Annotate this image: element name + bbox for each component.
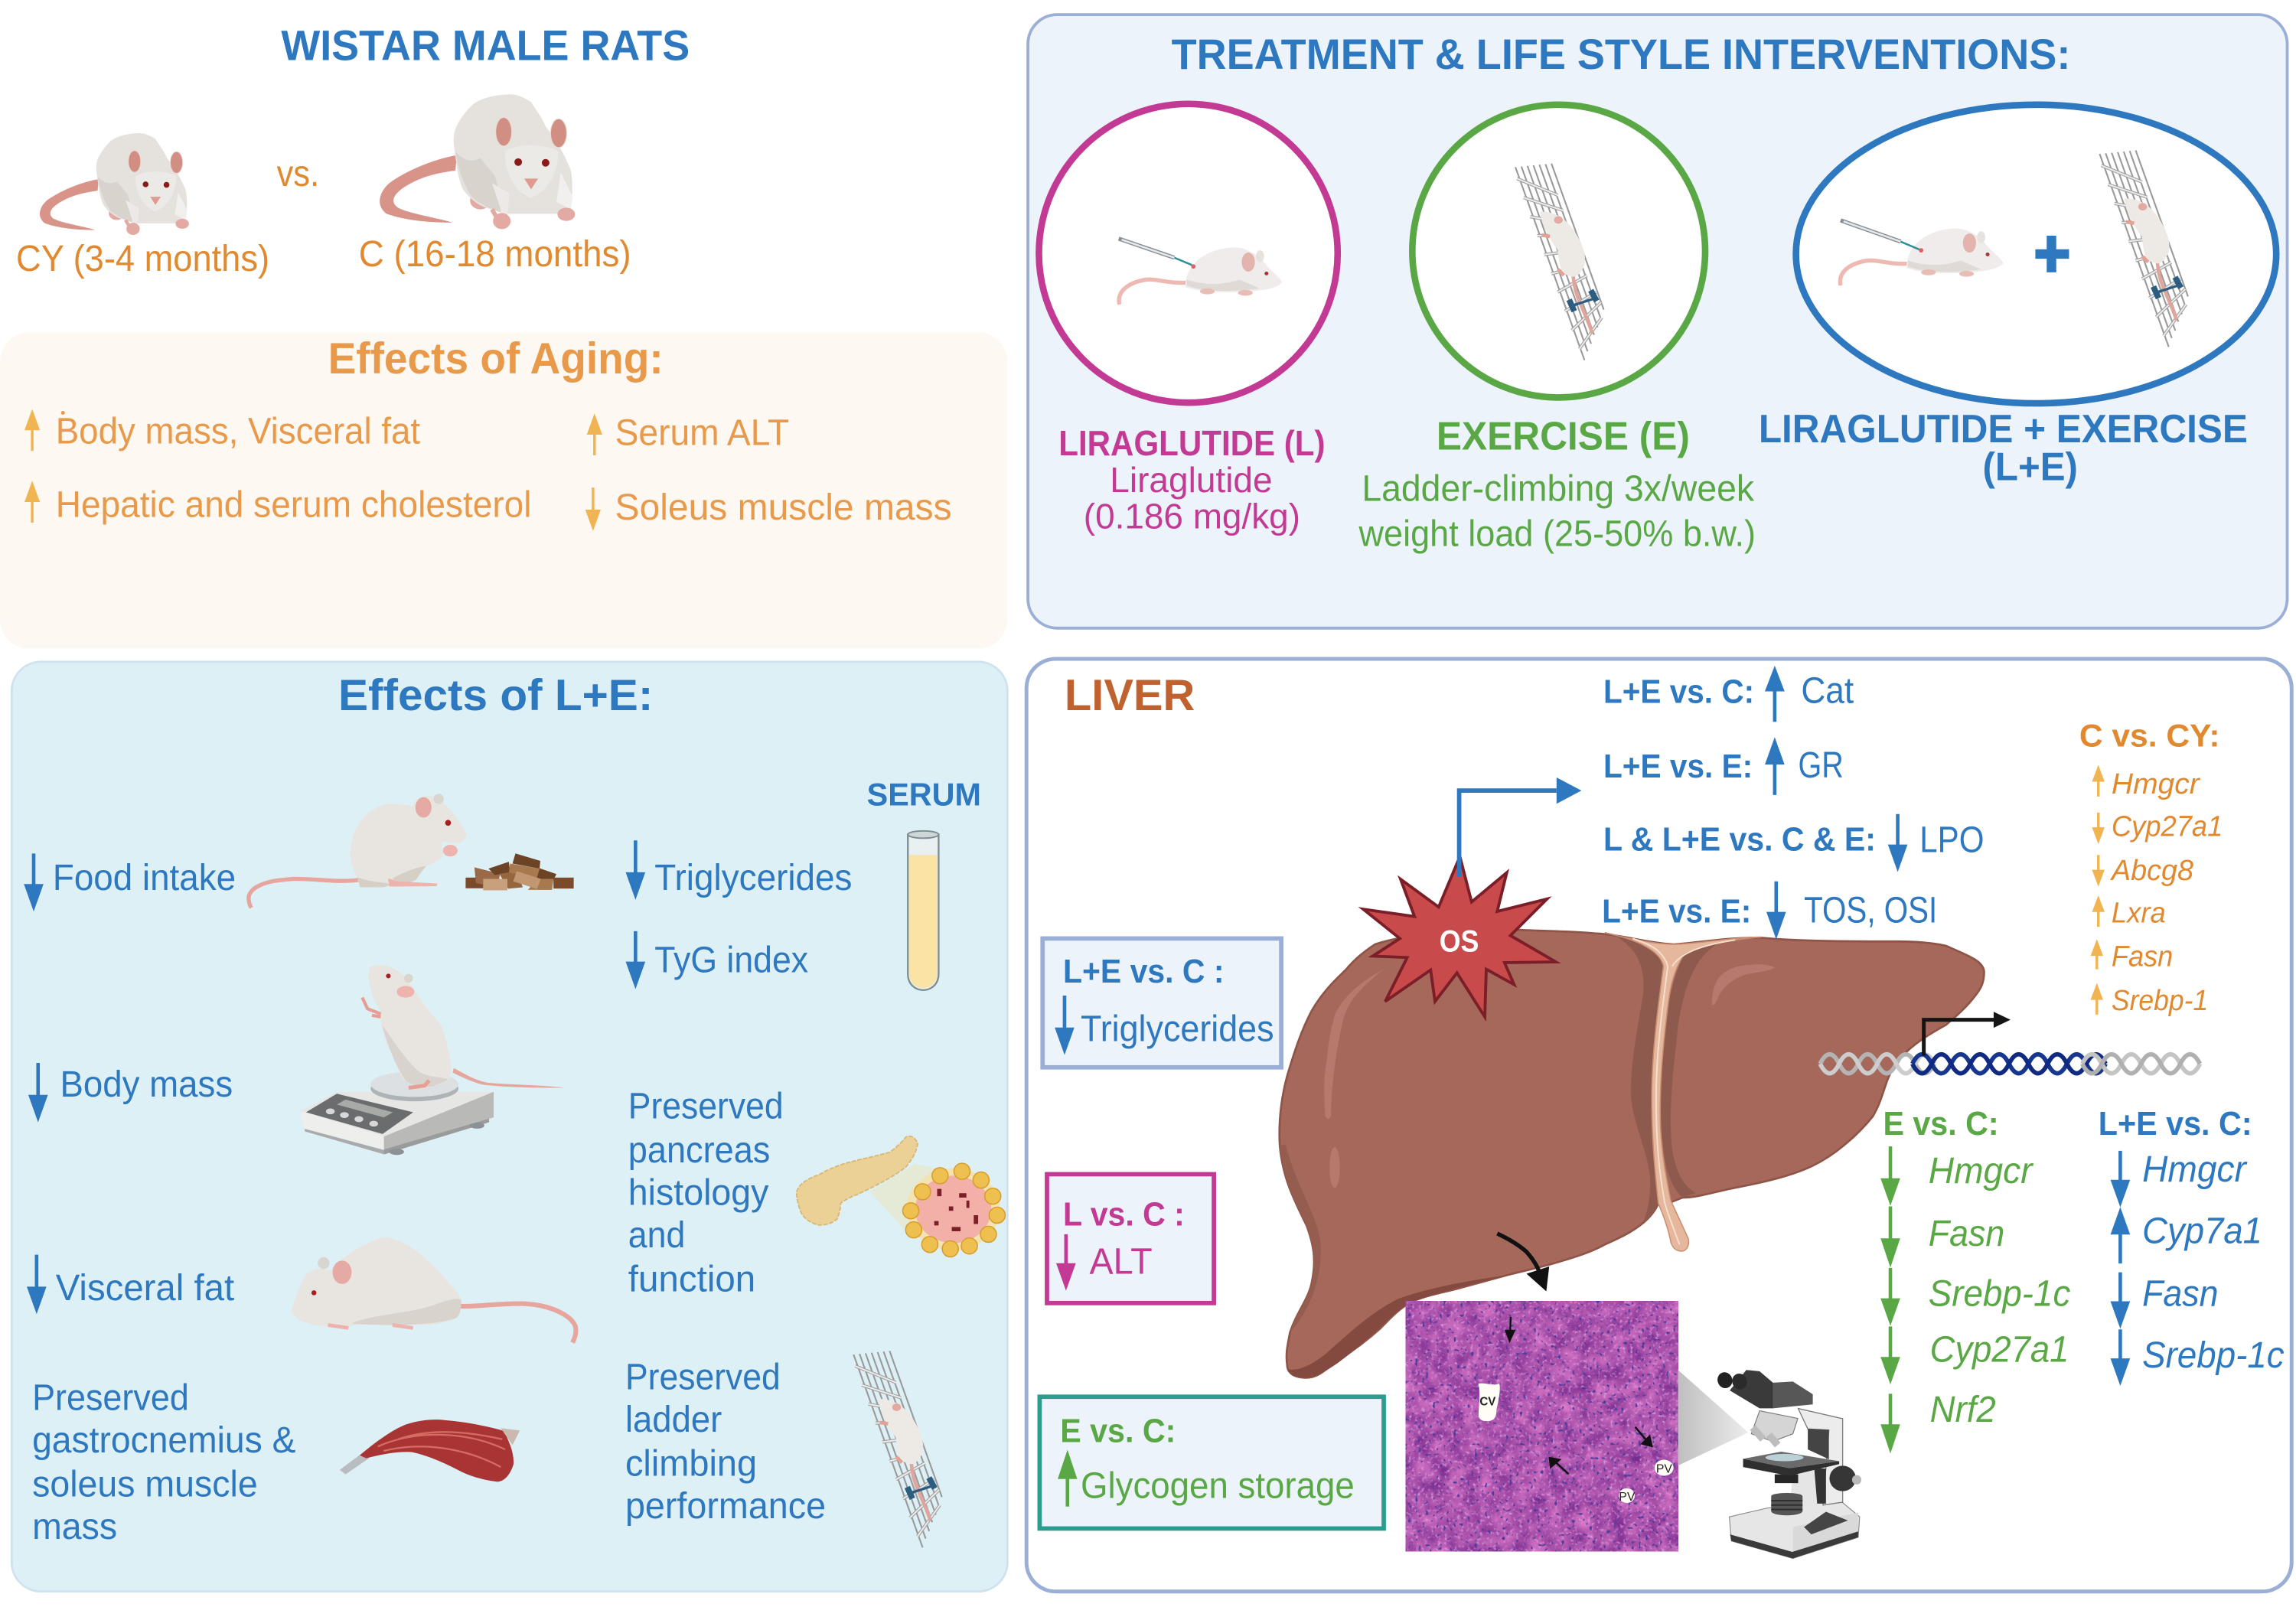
arrowhead: oxidative stress [1557, 777, 1581, 804]
item: LPO: L & L+E vs. C & E: [1603, 821, 1876, 859]
list: L+E vs C genes [2099, 1105, 2285, 1380]
heading: Wistar male rats: WISTAR MALE RATS [281, 21, 690, 69]
item: soleus muscle mass: Soleus muscle mass [615, 487, 952, 528]
item: Cat: L+E vs. C: [1603, 673, 1754, 710]
callout: L vs C ALT [1047, 1174, 1214, 1303]
text: preserved pancreas: function [628, 1259, 755, 1299]
icon: pancreas [797, 1136, 1005, 1257]
icon: injected rat [1840, 220, 2003, 285]
item: visceral fat [29, 1255, 234, 1309]
panel: effects of aging [0, 332, 1007, 649]
text: exercise: Ladder-climbing 3x/week [1362, 468, 1754, 509]
label: vs: vs. [277, 154, 319, 194]
icon: serum test tube [908, 831, 938, 990]
callout: L+E vs C triglycerides: Triglycerides [1081, 1009, 1274, 1049]
text: preserved ladder climbing [625, 1358, 826, 1527]
text: preserved ladder climbing: Preserved [625, 1358, 781, 1398]
heading: effects of L+E: Effects of L+E: [338, 671, 653, 720]
icon: microscope zoom cone [1678, 1370, 1748, 1465]
text: liraglutide: LIRAGLUTIDE (L) [1058, 423, 1326, 463]
list: C vs CY genes: Srebp-1 [2112, 984, 2208, 1017]
icon: climbing rat [2099, 142, 2202, 347]
item: triglycerides: Triglycerides [654, 858, 853, 898]
list: E vs C genes: Fasn [1929, 1214, 2004, 1254]
text: exercise: EXERCISE (E) [1437, 413, 1690, 458]
list: E vs C genes [1883, 1105, 2070, 1448]
item: TyG index: TyG index [654, 940, 808, 980]
panel: liver [1026, 659, 2291, 1592]
text: liraglutide plus exercise: (L+E) [1983, 445, 2078, 489]
list: E vs C genes: E vs. C: [1883, 1105, 1999, 1143]
list: C vs CY genes: Hmgcr [2112, 768, 2201, 800]
arrow: liver to histology [1497, 1234, 1549, 1292]
list: C vs CY genes: Lxra [2112, 896, 2166, 929]
item: visceral fat: Visceral fat [56, 1268, 234, 1309]
image: liver histology: CV [1479, 1396, 1496, 1409]
text: preserved pancreas: histology [628, 1173, 769, 1214]
panel: treatment and lifestyle interventions [1028, 15, 2288, 628]
item: TOS OSI: TOS, OSI [1804, 890, 1937, 931]
panel: effects of L+E [11, 662, 1007, 1592]
list: L+E vs C genes: L+E vs. C: [2099, 1105, 2252, 1143]
label: C age: C (16-18 months) [359, 234, 631, 275]
list: C vs CY genes: Abcg8 [2110, 854, 2194, 887]
list: C vs CY genes: Fasn [2112, 940, 2173, 973]
text: preserved gastrocnemius and soleus: mass [32, 1507, 117, 1547]
item: TOS OSI: L+E vs. E: [1602, 892, 1751, 930]
text: preserved pancreas: and [628, 1215, 685, 1256]
icon: rat eating [249, 794, 467, 908]
list: E vs C genes: Hmgcr [1929, 1151, 2034, 1191]
arrow: transcription start [1924, 1020, 1994, 1055]
icon: food pellets [465, 853, 574, 890]
text: preserved ladder climbing: ladder [625, 1400, 722, 1440]
list: C vs CY genes: C vs. CY: [2079, 718, 2220, 754]
item: body mass [31, 1063, 233, 1117]
icon: climbing rat [853, 1343, 956, 1547]
list: C vs CY genes: Cyp27a1 [2112, 810, 2223, 843]
list: L+E vs C genes: Srebp-1c [2142, 1335, 2285, 1376]
list: L+E vs C genes: Hmgcr [2142, 1149, 2248, 1190]
heading: effects of aging: Effects of Aging: [328, 334, 664, 383]
image: liver histology: PV [1656, 1463, 1673, 1476]
item: food intake [26, 853, 236, 906]
callout: E vs C glycogen: E vs. C: [1060, 1413, 1176, 1450]
icon: oxidative stress burst [1363, 856, 1556, 1017]
circle: exercise [1412, 105, 1705, 397]
icon: muscle [340, 1420, 520, 1482]
arrowhead: transcription start [1994, 1012, 2011, 1028]
item: Cat [1603, 670, 1854, 722]
item: body mass: Body mass [60, 1064, 233, 1105]
icon: DNA strand with promoter [1820, 1012, 2200, 1074]
heading: interventions: TREATMENT & LIFE STYLE INTERVENTIONS: [1172, 31, 2070, 78]
callout: L+E vs C triglycerides [1042, 938, 1281, 1068]
text: preserved pancreas [628, 1087, 784, 1299]
text: preserved gastrocnemius and soleus: Preserved [32, 1377, 189, 1418]
item: TOS OSI [1602, 882, 1937, 934]
list: E vs C genes: Nrf2 [1930, 1390, 1996, 1430]
callout: L vs C ALT: L vs. C : [1063, 1195, 1185, 1233]
icon: rat on scale [301, 965, 566, 1155]
callout: L vs C ALT: ALT [1089, 1242, 1153, 1283]
item: cholesterol: Hepatic and serum cholesterol [56, 484, 532, 525]
icon: aged rat [380, 94, 575, 229]
callout: L+E vs C triglycerides: L+E vs. C : [1063, 953, 1224, 990]
text: preserved pancreas: pancreas [628, 1130, 770, 1171]
callout: E vs C glycogen: Glycogen storage [1081, 1465, 1355, 1506]
text: exercise: weight load (25-50% b.w.) [1358, 514, 1756, 555]
section: Wistar male rats [16, 21, 690, 279]
icon: oxidative stress burst: OS [1440, 924, 1479, 959]
item: LPO [1603, 814, 1984, 867]
arrow: oxidative stress to markers [1459, 790, 1557, 877]
item: body mass and visceral fat: Body mass, Visceral fat [56, 412, 420, 452]
text: liraglutide: (0.186 mg/kg) [1084, 497, 1300, 536]
icon: young rat [40, 133, 189, 235]
item: triglycerides [628, 840, 853, 898]
text: preserved gastrocnemius and soleus: soleus muscle [32, 1464, 258, 1504]
icon: plus [2035, 236, 2069, 272]
circle: liraglutide [1039, 104, 1338, 403]
item: LPO: LPO [1919, 820, 1984, 861]
image: liver histology: PV [1619, 1491, 1636, 1504]
icon: climbing rat [1515, 155, 1618, 360]
text: preserved gastrocnemius and soleus [32, 1377, 296, 1547]
image: liver histology [1406, 1301, 1678, 1551]
label: CY age: CY (3-4 months) [16, 239, 269, 279]
item: food intake: Food intake [53, 858, 236, 898]
heading: liver: LIVER [1065, 671, 1195, 720]
icon: rat with visceral fat [292, 1237, 576, 1342]
text: liraglutide plus exercise [1759, 406, 2248, 489]
item: TyG index [628, 931, 808, 984]
label: serum: SERUM [867, 776, 981, 812]
circle: liraglutide plus exercise [1796, 105, 2276, 403]
item: GR: GR [1798, 745, 1844, 786]
text: liraglutide [1058, 423, 1326, 536]
illustration: liver [1280, 930, 1984, 1377]
list: E vs C genes: Srebp-1c [1929, 1274, 2070, 1315]
text: preserved ladder climbing: climbing [625, 1444, 757, 1485]
item: serum ALT: Serum ALT [615, 413, 789, 454]
item: GR: L+E vs. E: [1603, 748, 1753, 785]
text: liraglutide: Liraglutide [1110, 460, 1273, 500]
item: GR [1603, 742, 1844, 795]
text: preserved ladder climbing: performance [625, 1486, 826, 1527]
item: Cat: Cat [1801, 670, 1854, 711]
text: preserved pancreas: Preserved [628, 1087, 784, 1127]
list: E vs C genes: Cyp27a1 [1930, 1329, 2069, 1370]
list: L+E vs C genes: Fasn [2142, 1274, 2219, 1315]
text: liraglutide plus exercise: LIRAGLUTIDE + EXERCISE [1759, 406, 2248, 451]
text: preserved gastrocnemius and soleus: gastrocnemius & [32, 1420, 296, 1461]
text: exercise [1358, 413, 1756, 555]
list: L+E vs C genes: Cyp7a1 [2142, 1211, 2262, 1251]
callout: E vs C glycogen [1039, 1397, 1384, 1528]
list: C vs CY genes [2079, 718, 2223, 1017]
icon: injected rat [1119, 239, 1282, 305]
icon: microscope [1715, 1370, 1861, 1558]
